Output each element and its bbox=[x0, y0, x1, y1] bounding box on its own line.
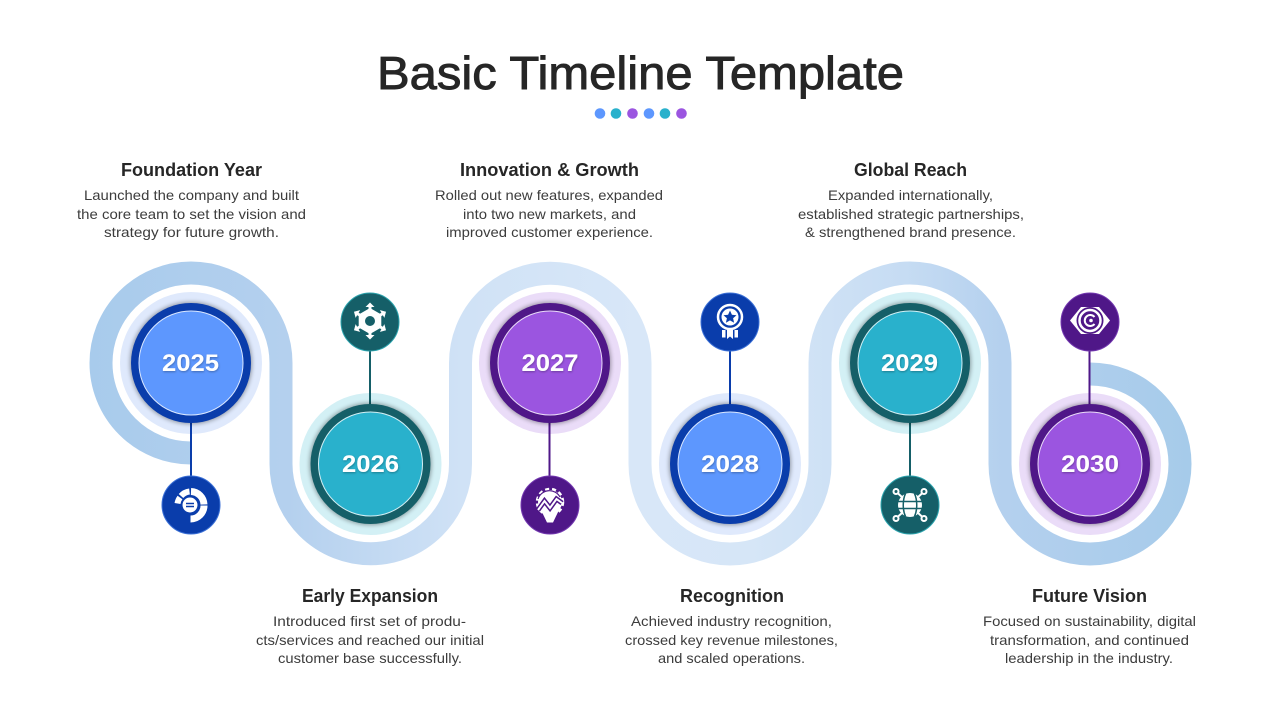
text block: Recognition: and scaled operations. bbox=[658, 650, 805, 666]
text block: Foundation Year bbox=[77, 160, 306, 240]
icon: award medal bbox=[701, 293, 759, 351]
icon: idea bulb with chart bbox=[521, 476, 579, 534]
milestone 2027: 2027 bbox=[522, 350, 578, 377]
text block: Foundation Year: the core team to set the vision and bbox=[77, 206, 306, 222]
text block: Foundation Year: strategy for future growth. bbox=[104, 224, 279, 240]
text block: Global Reach: established strategic partnerships, bbox=[798, 206, 1024, 222]
icon: gear with arrows bbox=[341, 293, 399, 351]
text block: Innovation & Growth: into two new markets, and bbox=[463, 206, 636, 222]
milestone 2029: 2029 bbox=[881, 350, 938, 377]
milestone 2026 bbox=[300, 350, 442, 535]
text block: Recognition: Recognition bbox=[680, 586, 784, 606]
title decorative dots bbox=[595, 108, 687, 119]
milestone 2028: 2028 bbox=[701, 451, 759, 478]
winding timeline ribbon bbox=[101, 273, 1180, 554]
milestone 2030 bbox=[1019, 350, 1161, 535]
text block: Innovation & Growth: Innovation & Growth bbox=[460, 160, 639, 180]
text block: Foundation Year: Launched the company and built bbox=[84, 187, 299, 203]
text block: Future Vision: Future Vision bbox=[1032, 586, 1147, 606]
milestone 2029 bbox=[839, 292, 981, 480]
text block: Future Vision bbox=[983, 586, 1196, 666]
icon: donut chart bbox=[162, 476, 220, 534]
text block: Early Expansion: customer base successfully. bbox=[278, 650, 462, 666]
text block: Recognition: Achieved industry recognition, bbox=[631, 613, 832, 629]
text block: Foundation Year: Foundation Year bbox=[121, 160, 262, 180]
text block: Future Vision: transformation, and continued bbox=[990, 632, 1189, 648]
milestone 2027 bbox=[479, 292, 621, 480]
milestone 2026: 2026 bbox=[342, 451, 399, 478]
text block: Early Expansion: cts/services and reached our initial bbox=[256, 632, 484, 648]
text block: Innovation & Growth bbox=[435, 160, 663, 240]
title: Basic Timeline Template bbox=[377, 47, 904, 99]
text block: Global Reach: Global Reach bbox=[854, 160, 967, 180]
text block: Global Reach: & strengthened brand presence. bbox=[805, 224, 1016, 240]
icon: connected globe bbox=[881, 476, 939, 534]
text block: Global Reach bbox=[798, 160, 1024, 240]
text block: Early Expansion bbox=[256, 586, 484, 666]
text block: Recognition bbox=[625, 586, 838, 666]
text block: Early Expansion: Early Expansion bbox=[302, 586, 438, 606]
text block: Future Vision: Focused on sustainability, digital bbox=[983, 613, 1196, 629]
text block: Innovation & Growth: Rolled out new features, expanded bbox=[435, 187, 663, 203]
milestone 2028 bbox=[659, 350, 801, 535]
text block: Recognition: crossed key revenue milestones, bbox=[625, 632, 838, 648]
text block: Future Vision: leadership in the industry. bbox=[1005, 650, 1173, 666]
text block: Innovation & Growth: improved customer experience. bbox=[446, 224, 653, 240]
milestone 2030: 2030 bbox=[1061, 451, 1119, 478]
text block: Early Expansion: Introduced first set of produ- bbox=[273, 613, 466, 629]
icon: vision eye bbox=[1061, 293, 1119, 351]
text block: Global Reach: Expanded internationally, bbox=[828, 187, 993, 203]
milestone 2025 bbox=[120, 292, 262, 480]
milestone 2025: 2025 bbox=[162, 350, 219, 377]
